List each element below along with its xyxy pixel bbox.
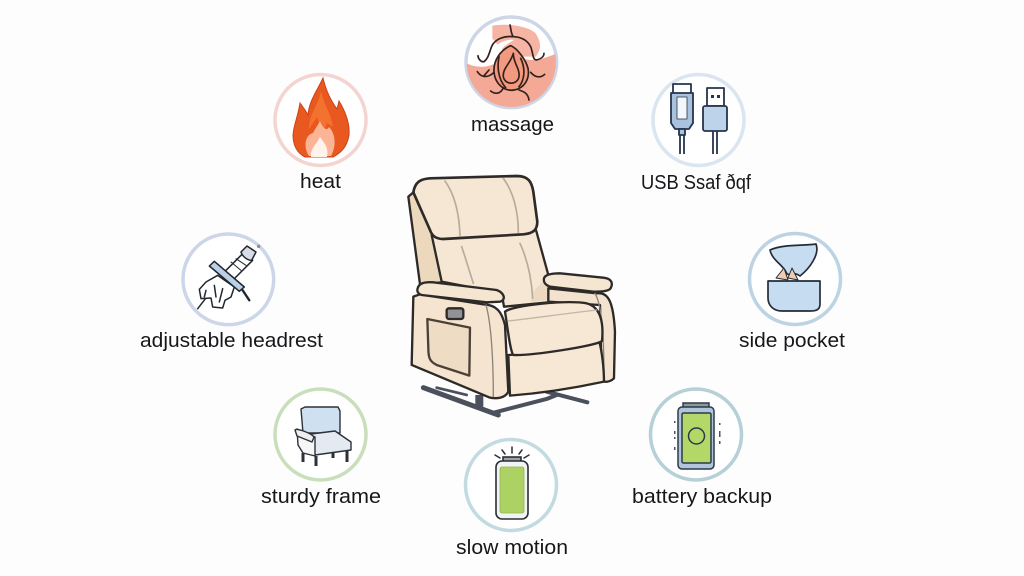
chair right armrest xyxy=(544,273,612,292)
icon: massage xyxy=(464,17,559,110)
label: sturdy frame: sturdy frame xyxy=(261,485,381,508)
label: slow motion: slow motion xyxy=(456,536,568,559)
chair side pocket xyxy=(427,319,470,376)
chair backrest xyxy=(432,230,549,307)
chair headrest xyxy=(413,176,537,239)
item: slow motion xyxy=(456,440,568,559)
icon: side pocket xyxy=(750,234,840,324)
item: side pocket xyxy=(739,234,845,352)
label: side pocket: side pocket xyxy=(739,329,845,352)
chair back side xyxy=(408,191,443,284)
chair seat cushion xyxy=(505,302,602,355)
icon: armchair xyxy=(275,389,366,480)
icon: battery backup xyxy=(650,389,742,480)
chair right arm panel xyxy=(548,288,615,382)
item: heat xyxy=(275,74,366,193)
item: battery backup xyxy=(632,389,772,508)
label: battery backup: battery backup xyxy=(632,485,772,508)
chair base frame xyxy=(423,388,587,415)
label: adjustable headrest: adjustable headrest xyxy=(140,329,323,352)
item: adjustable headrest xyxy=(140,234,323,352)
icon: flame xyxy=(275,74,366,166)
icon: recliner chair xyxy=(408,176,615,415)
label: USB: USB Ssaf ðqf xyxy=(641,171,751,194)
item: USB xyxy=(641,74,751,194)
chair left body xyxy=(412,294,508,398)
label: massage: massage xyxy=(471,113,554,136)
chair lower seat xyxy=(508,342,604,396)
icon: charging battery xyxy=(466,440,556,530)
chair left armrest xyxy=(417,282,504,302)
icon: USB cables xyxy=(653,74,744,166)
item: massage xyxy=(464,17,559,136)
icon: headrest tool xyxy=(183,234,274,325)
chair control panel xyxy=(447,308,463,319)
label: heat: heat xyxy=(300,170,341,193)
item: sturdy frame xyxy=(261,389,381,508)
